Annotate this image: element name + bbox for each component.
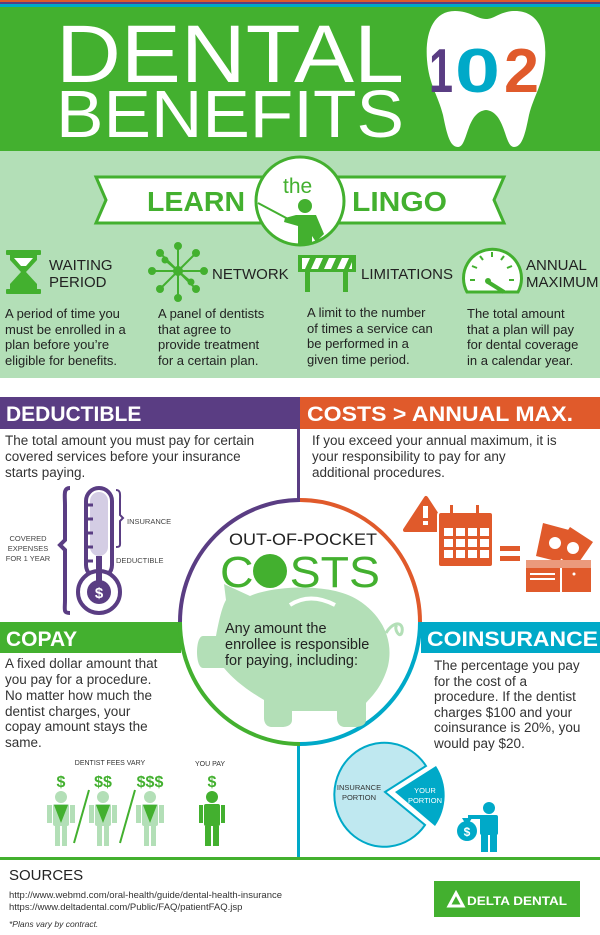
term: network: NETWORK <box>212 266 289 283</box>
term: annual maximum: MAXIMUM <box>526 274 598 291</box>
chart: pie: PORTION <box>342 793 376 802</box>
panel: copay: A fixed dollar amount that <box>5 656 158 671</box>
header panel <box>0 7 600 152</box>
term: waiting period: WAITING <box>49 257 113 274</box>
icon: gauge <box>464 249 522 292</box>
chart: pie: INSURANCE <box>337 783 381 792</box>
term: waiting period: A period of time you <box>5 306 120 321</box>
term: annual maximum: for dental coverage <box>467 337 578 352</box>
panel: coinsurance <box>334 622 600 852</box>
term: waiting period: plan before you’re <box>5 337 109 352</box>
banner <box>96 157 504 245</box>
icon: tooth with 102: 2 <box>504 37 539 106</box>
panel: coinsurance: The percentage you pay <box>434 658 580 673</box>
panel: coinsurance: coinsurance is 20%, you <box>434 720 580 735</box>
icon: thermometer: FOR 1 YEAR <box>6 554 51 563</box>
panel: out-of-pocket costs circle: OUT-OF-POCKET <box>229 530 377 549</box>
panel: costs > annual max: If you exceed your annual maximum, it is <box>312 433 557 448</box>
top stripes <box>0 0 600 7</box>
panel: costs > annual max: additional procedures. <box>312 465 445 480</box>
panel: coinsurance: charges $100 and your <box>434 705 573 720</box>
icon: teacher <box>258 199 324 244</box>
panel: costs > annual max: your responsibility to pay for any <box>312 449 506 464</box>
panel: costs > annual max: COSTS > ANNUAL MAX. <box>307 403 573 426</box>
icon: man with money bag: $ <box>464 825 471 839</box>
banner: LINGO <box>352 186 447 217</box>
panel: deductible: The total amount you must pay for certain <box>5 433 254 448</box>
chart: dentist fees people: $$$ <box>137 774 163 791</box>
panel: copay: dentist charges, your <box>5 704 131 719</box>
panel: copay: same. <box>5 735 42 750</box>
sources: SOURCES <box>9 867 83 884</box>
panel: coinsurance: procedure. If the dentist <box>434 689 576 704</box>
term: network: provide treatment <box>158 337 260 352</box>
panel: deductible: DEDUCTIBLE <box>6 403 141 426</box>
chart: dentist fees people <box>47 760 225 846</box>
panel: copay: COPAY <box>6 628 77 651</box>
logo: delta dental <box>434 881 580 917</box>
term: waiting period: must be enrolled in a <box>5 322 126 337</box>
panel: coinsurance: for the cost of a <box>434 674 528 689</box>
title: DENTAL <box>56 9 404 100</box>
chart: dentist fees people: $ <box>208 774 217 791</box>
term: limitations: of times a service can <box>307 321 433 336</box>
icon: man with money bag <box>457 802 498 852</box>
term: network <box>149 243 289 368</box>
icon: network <box>149 243 207 301</box>
chart: pie: PORTION <box>408 796 442 805</box>
icon: thermometer: $ <box>95 585 104 602</box>
panel: out-of-pocket costs circle: for paying, including: <box>225 653 358 669</box>
chart: pie <box>334 743 445 847</box>
icon: thermometer: EXPENSES <box>8 544 48 553</box>
panel: out-of-pocket costs circle <box>180 500 420 744</box>
term: annual maximum: The total amount <box>467 306 565 321</box>
panel: copay: copay amount stays the <box>5 719 148 734</box>
panel: deductible: starts paying. <box>5 465 85 480</box>
icon: thermometer: COVERED <box>9 534 47 543</box>
icon: tooth with 102: 1 <box>429 37 453 106</box>
term: limitations: be performed in a <box>307 336 410 351</box>
panel: coinsurance: COINSURANCE <box>427 628 598 651</box>
term: network: A panel of dentists <box>158 306 265 321</box>
term: network: for a certain plan. <box>158 353 258 368</box>
panel: out-of-pocket costs circle: Any amount the <box>225 621 327 637</box>
term: network: that agree to <box>158 322 231 337</box>
icon: hourglass <box>6 250 41 294</box>
sources: https://www.deltadental.com/Public/FAQ/patientFAQ.jsp <box>9 902 242 913</box>
banner: LEARN <box>147 186 245 217</box>
term: annual maximum <box>464 249 598 368</box>
term: annual maximum: in a calendar year. <box>467 353 573 368</box>
panel: deductible <box>0 397 300 613</box>
banner: the <box>283 175 312 198</box>
term: waiting period: PERIOD <box>49 274 107 291</box>
panel: copay: you pay for a procedure. <box>5 672 151 687</box>
panel: copay: No matter how much the <box>5 688 152 703</box>
chart: dentist fees people: YOU PAY <box>195 761 225 768</box>
term: waiting period: eligible for benefits. <box>5 353 117 368</box>
chart: dentist fees people: $$ <box>94 774 112 791</box>
sources: http://www.webmd.com/oral-health/guide/dental-health-insurance <box>9 890 282 901</box>
chart: pie: YOUR <box>414 786 436 795</box>
term: annual maximum: that a plan will pay <box>467 322 574 337</box>
term: annual maximum: ANNUAL <box>526 257 587 274</box>
title: BENEFITS <box>56 77 404 152</box>
icon: barrier <box>298 255 356 292</box>
icon: warning calendar equals wallet <box>405 498 593 592</box>
panel: deductible: covered services before your insurance <box>5 449 241 464</box>
icon: thermometer: INSURANCE <box>127 517 171 526</box>
sources <box>9 867 282 929</box>
term: limitations <box>298 255 453 367</box>
panel: out-of-pocket costs circle: enrollee is responsible <box>225 637 369 653</box>
dividers <box>0 429 600 860</box>
icon: tooth with 102: 0 <box>455 37 500 106</box>
icon: thermometer <box>6 488 171 613</box>
sources: *Plans vary by contract. <box>9 919 98 929</box>
panel: copay <box>0 622 225 846</box>
panel: out-of-pocket costs circle: COSTS <box>220 548 380 597</box>
term: limitations: given time period. <box>307 352 410 367</box>
title <box>56 9 404 152</box>
chart: dentist fees people: $ <box>57 774 66 791</box>
icon: tooth with 102 <box>427 11 545 147</box>
term: limitations: LIMITATIONS <box>361 266 453 283</box>
term: limitations: A limit to the number <box>307 305 426 320</box>
panel: coinsurance: would pay $20. <box>433 736 525 751</box>
logo: delta dental: DELTA DENTAL <box>467 894 567 908</box>
icon: thermometer: DEDUCTIBLE <box>116 556 164 565</box>
panel: costs > annual max <box>300 397 600 592</box>
icon: piggy bank <box>197 584 402 727</box>
chart: dentist fees people: DENTIST FEES VARY <box>75 760 146 767</box>
term: waiting period <box>5 250 126 368</box>
panel: learn the lingo <box>0 151 600 378</box>
